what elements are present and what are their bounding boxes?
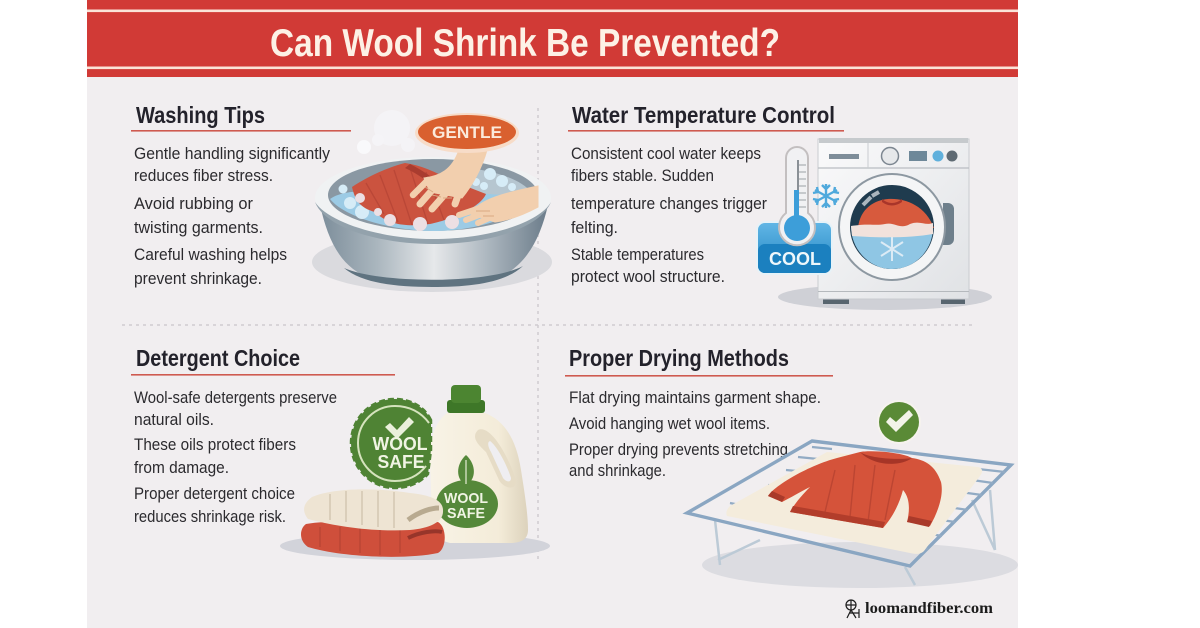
folded cream wool [304, 489, 443, 530]
heading: washing tips: Washing Tips [136, 102, 265, 128]
icon: wool safe products [280, 385, 550, 560]
snowflake [813, 184, 839, 208]
underline: detergent choice [131, 374, 395, 376]
panel: detergent choice [131, 345, 550, 560]
text: proper drying body: Proper drying prevents stretching [569, 441, 788, 459]
underline: proper drying [565, 375, 833, 377]
icon: washing machine [778, 138, 992, 310]
text: washing tips body: reduces fiber stress. [134, 167, 273, 185]
underline: water temperature [568, 130, 844, 132]
title banner [87, 0, 1018, 77]
page background [87, 0, 1018, 628]
icon: wool safe products: SAFE [447, 505, 485, 522]
text: water temperature body [571, 145, 767, 286]
heading: proper drying methods: Proper Drying Methods [569, 345, 789, 371]
hands [413, 150, 538, 223]
horizontal divider [122, 324, 972, 326]
folded red wool [301, 521, 445, 557]
text: washing tips body: twisting garments. [134, 219, 263, 237]
badge: green check [877, 400, 921, 444]
text: water temperature body: Consistent cool water keeps [571, 145, 761, 163]
heading: detergent choice: Detergent Choice [136, 345, 300, 371]
text: detergent choice body: Wool-safe detergents preserve [134, 389, 337, 407]
red sweater in bowl [352, 163, 486, 225]
text: proper drying body: Avoid hanging wet wool items. [569, 415, 770, 433]
icon: cool thermometer [757, 147, 839, 274]
badge: gentle [415, 113, 519, 153]
text: proper drying body [569, 389, 821, 480]
text: detergent choice body: natural oils. [134, 411, 214, 429]
logo: loomandfiber.com: loomandfiber.com [865, 600, 994, 617]
text: washing tips body: Careful washing helps [134, 246, 287, 264]
badge: wool safe seal: SAFE [378, 451, 424, 472]
text: water temperature body: felting. [571, 219, 618, 237]
text: water temperature body: protect wool structure. [571, 268, 725, 286]
vertical divider [537, 108, 539, 562]
icon: spinning wheel [846, 600, 859, 618]
panel: washing tips [131, 102, 552, 292]
text: washing tips body [134, 145, 331, 288]
text: washing tips body: prevent shrinkage. [134, 270, 262, 288]
badge: gentle: GENTLE [432, 124, 502, 142]
text: detergent choice body: from damage. [134, 459, 229, 477]
underline: washing tips [131, 130, 351, 132]
text: water temperature body: temperature changes trigger [571, 195, 767, 213]
text: proper drying body: Flat drying maintains garment shape. [569, 389, 821, 407]
badge: wool safe seal [351, 399, 431, 488]
text: water temperature body: fibers stable. Sudden [571, 167, 714, 185]
text: detergent choice body [134, 389, 337, 526]
title: Can Wool Shrink Be Prevented? [270, 22, 780, 65]
text: water temperature body: Stable temperatures [571, 246, 704, 264]
text: detergent choice body: Proper detergent choice [134, 485, 295, 503]
red sweater [768, 451, 942, 528]
text: proper drying body: and shrinkage. [569, 462, 666, 480]
text: washing tips body: Gentle handling significantly [134, 145, 331, 163]
text: detergent choice body: reduces shrinkage risk. [134, 508, 286, 526]
text: washing tips body: Avoid rubbing or [134, 195, 254, 213]
white wool mat [726, 452, 982, 554]
icon: drying rack with sweater [687, 400, 1018, 588]
text: detergent choice body: These oils protect fibers [134, 436, 296, 454]
cool label: COOL [769, 249, 821, 269]
panel: proper drying methods [565, 345, 1018, 588]
panel: water temperature control [568, 102, 992, 310]
heading: water temperature control: Water Temperature Control [572, 102, 835, 128]
icon: washing bowl with gentle hands [312, 110, 552, 292]
badge: wool safe seal: WOOL [372, 433, 428, 454]
icon: wool safe products: WOOL [444, 490, 488, 507]
detergent bottle [430, 413, 528, 543]
